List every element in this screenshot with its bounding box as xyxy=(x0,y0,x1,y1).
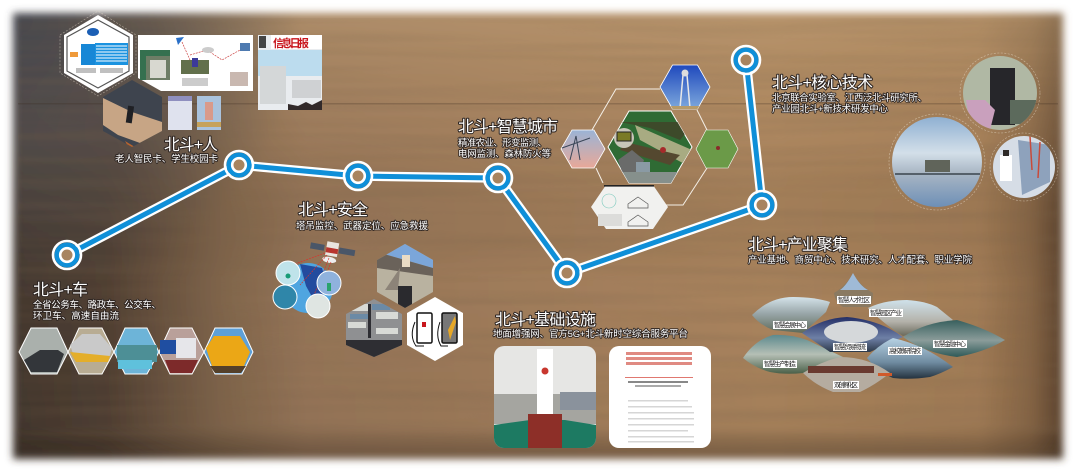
description: 全省公务车、路政车、公交车、 xyxy=(33,299,161,311)
section: 北斗+安全 xyxy=(273,201,463,361)
description xyxy=(772,92,927,115)
route nodes xyxy=(57,50,772,283)
description: 产业园北斗+新技术研发中心 xyxy=(772,103,888,115)
description xyxy=(458,137,551,160)
heading: 北斗+人 xyxy=(164,136,218,154)
image: power grid hexagon xyxy=(561,130,605,168)
description: 产业基地、商贸中心、技术研究、人才配套、职业学院 xyxy=(748,254,972,266)
building labels: 智慧金融中心 xyxy=(934,339,966,348)
heading: 北斗+基础设施 xyxy=(495,311,596,329)
building labels xyxy=(763,295,967,389)
building labels: 智慧会展中心 xyxy=(774,320,806,329)
description: 环卫车、高速自由流 xyxy=(33,310,119,322)
section: 北斗+人 xyxy=(60,11,322,165)
image: phones hexagon xyxy=(407,297,463,361)
image: booklets xyxy=(168,96,221,130)
image: newspaper xyxy=(258,35,322,110)
description: 老人智民卡、学生校园卡 xyxy=(115,153,218,165)
section: 北斗+核心技术 xyxy=(772,53,1058,210)
image cluster: industry leaves xyxy=(743,273,1005,392)
hexagon frame xyxy=(592,89,707,205)
image: tower hexagon xyxy=(660,65,710,110)
image: lab circle 1 xyxy=(960,53,1040,133)
heading: 北斗+产业聚集 xyxy=(748,236,848,254)
building labels: 智慧人才社区 xyxy=(838,295,870,304)
building labels: 高校教研院校 xyxy=(889,346,922,355)
building labels: 双创孵化区 xyxy=(834,380,858,389)
section: 北斗+车 xyxy=(19,281,253,374)
icon: satellite and globe xyxy=(273,238,356,318)
heading: 北斗+安全 xyxy=(298,201,368,219)
route line xyxy=(53,46,776,287)
building labels: 智慧贸易物流 xyxy=(834,342,866,351)
heading: 北斗+智慧城市 xyxy=(458,118,558,136)
image: monitoring interface hexagon xyxy=(591,185,668,229)
description: 精准农业、形变监测、 xyxy=(458,137,547,149)
description: 塔吊监控、武器定位、应急救援 xyxy=(296,220,428,232)
image: smart farm main hexagon xyxy=(608,111,692,185)
image: hand wearable hexagon xyxy=(103,80,162,150)
section: 北斗+基础设施 xyxy=(493,311,711,448)
image: surveyor hexagon xyxy=(377,240,433,308)
description xyxy=(33,299,161,322)
image: farmland hexagon xyxy=(696,130,738,168)
building labels: 智慧生产制造 xyxy=(764,359,796,368)
image: hall circle xyxy=(889,114,985,210)
images: vehicle hexagons xyxy=(19,328,253,374)
description: 地面增强网、官方5G+北斗新时空综合服务平台 xyxy=(493,328,688,340)
image: monitoring wall hexagon xyxy=(346,299,402,358)
image: lab circle 2 xyxy=(990,133,1058,201)
section: 北斗+智慧城市 xyxy=(458,65,738,229)
image: base station photo xyxy=(494,346,596,448)
icon: ID card hexagon xyxy=(60,11,136,96)
heading: 北斗+核心技术 xyxy=(772,74,873,92)
section: 北斗+产业聚集 xyxy=(743,236,1005,392)
heading: 北斗+车 xyxy=(33,281,88,299)
description: 电网监测、森林防火等 xyxy=(458,148,551,160)
image: positioning diagram xyxy=(138,35,253,91)
image: newspaper: 信息日报 xyxy=(273,36,309,50)
image: document xyxy=(609,346,711,448)
building labels: 智慧园区产业 xyxy=(870,308,902,317)
description: 北京联合实验室、江西泛北斗研究所、 xyxy=(772,92,927,104)
